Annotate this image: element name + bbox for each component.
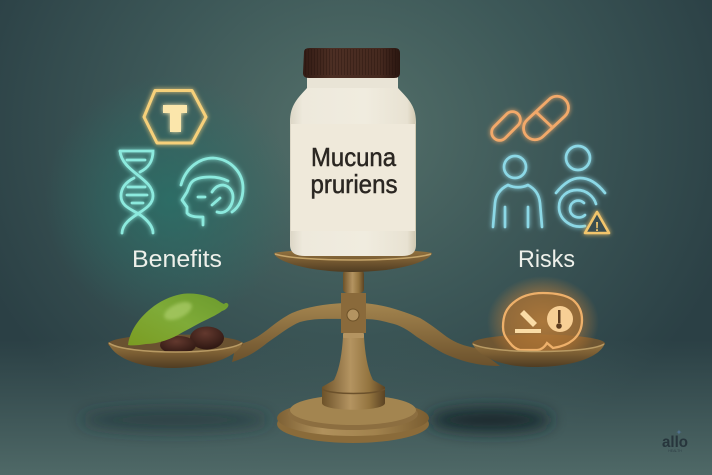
- icon: DNA helix: [120, 151, 153, 233]
- icon: person: [493, 156, 542, 227]
- beans: [160, 326, 224, 354]
- logo: allo: [662, 428, 688, 453]
- bottle body: [290, 88, 416, 256]
- bottle: [290, 48, 416, 256]
- bottle label: pruriens: [310, 169, 398, 199]
- collar and pivot box: [341, 270, 366, 338]
- stand: [277, 270, 429, 443]
- icon: warning triangle: [585, 212, 609, 234]
- icon: person with C symbol: [556, 146, 605, 227]
- right pan: [472, 343, 605, 367]
- logo: allo: HEALTH: [668, 449, 682, 453]
- icon: head profile with brain: [181, 158, 243, 225]
- pan shadows: [80, 408, 552, 432]
- right pan back: [472, 334, 605, 352]
- top plate: [274, 249, 432, 272]
- column: [322, 337, 385, 410]
- logo: allo: allo: [662, 434, 688, 451]
- bottle cap: [303, 48, 400, 78]
- heading: Risks: Risks: [518, 246, 575, 273]
- base: [277, 395, 429, 443]
- icon: hexagon testosterone T: [144, 90, 206, 143]
- scale arms: [232, 303, 500, 366]
- icon: pills: [488, 92, 573, 144]
- heading: Benefits: Benefits: [132, 246, 222, 273]
- bottle label: [291, 124, 415, 231]
- left pan back: [108, 334, 243, 354]
- bottle neck: [307, 76, 398, 92]
- icon: warning triangle: !: [595, 219, 599, 234]
- bottle label: Mucuna: [311, 142, 396, 172]
- logo: allo: ✦: [676, 428, 683, 437]
- pod: [128, 293, 228, 345]
- warning glow icon: [487, 276, 599, 368]
- left pan: [108, 342, 243, 368]
